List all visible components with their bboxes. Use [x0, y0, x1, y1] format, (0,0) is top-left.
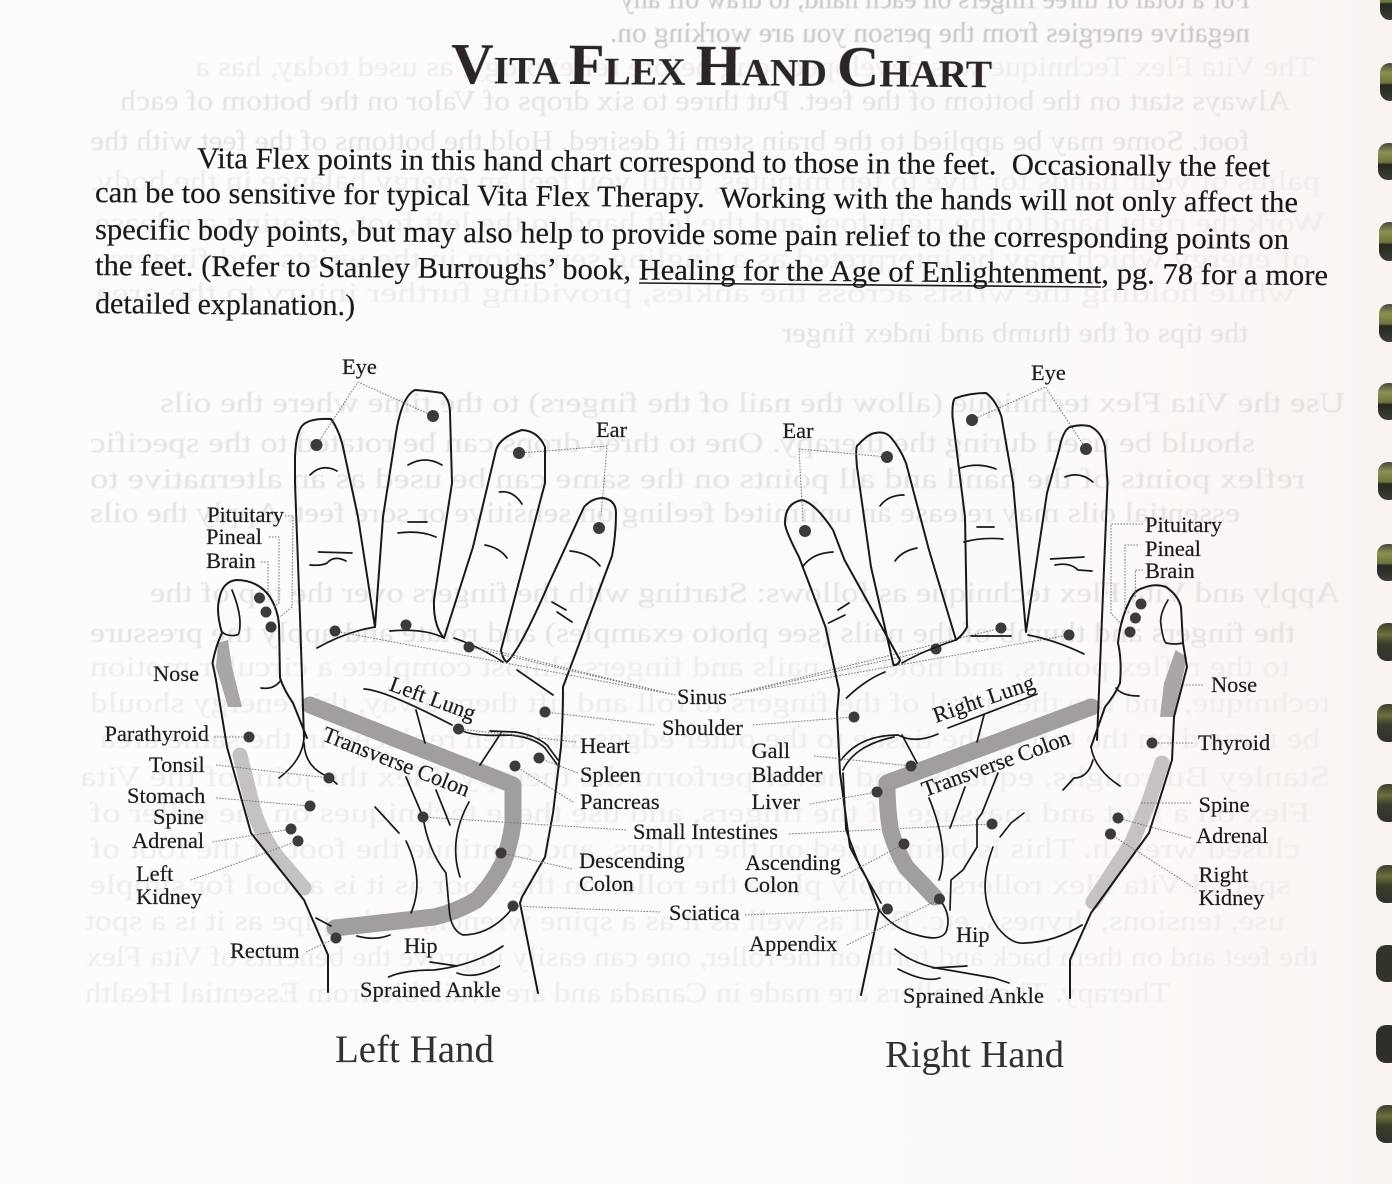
point: tonsil — [149, 752, 334, 784]
point: sciatica: Sciatica — [669, 900, 740, 925]
show-through text from the reverse page: should be used during the therapy. One to three drops can be rotated to the specific — [90, 428, 1255, 459]
point: appendix — [749, 894, 945, 956]
point: heart — [453, 724, 631, 758]
point: eye — [310, 354, 439, 451]
label: spine — [1141, 792, 1250, 817]
point: left kidney: Kidney — [136, 884, 203, 909]
show-through text from the reverse page: palms of your hands for five to ten minutes, until you feel an energy balance in the body. — [90, 166, 1320, 197]
point: ear: Ear — [596, 417, 628, 442]
show-through text from the reverse page: reflex points of the hand and all points on the same can be used as an alternative to — [90, 464, 1305, 495]
point: parathyroid: Parathyroid — [104, 721, 209, 746]
point: eye — [966, 360, 1092, 455]
show-through text from the reverse page: Use the Vita Flex technique (allow the nail of the fingers) to the time where the oils — [160, 388, 1345, 419]
point: ascending colon — [744, 838, 910, 897]
point: pituitary: Pituitary — [1145, 512, 1223, 537]
point: ear — [782, 418, 893, 537]
point: tonsil: Tonsil — [149, 752, 205, 777]
show-through text from the reverse page: to the reflex points, and hold the nails and fingers almost complete a circular motion — [90, 652, 1290, 683]
point: stomach: Stomach — [127, 783, 205, 808]
show-through text from the reverse page: use, tensions, dryness, etc. Roll as well as it as a spine wrench, and a pipe as it is a spot — [85, 906, 1285, 937]
label: left lung: Left Lung — [386, 671, 479, 725]
right hand: reflex bands — [887, 650, 1187, 902]
left hand: reflex bands — [216, 640, 513, 928]
point: heart: Heart — [580, 733, 631, 758]
point: thyroid: Thyroid — [1198, 730, 1270, 755]
heading: right hand: Right Hand — [885, 1034, 1064, 1076]
point: gall bladder — [752, 738, 916, 787]
point: stomach — [127, 783, 316, 812]
point: brain — [206, 548, 268, 604]
point: thyroid — [1146, 730, 1270, 755]
point: liver: Liver — [752, 789, 801, 814]
label: hip: Hip — [404, 933, 438, 958]
point: adrenal: Adrenal — [132, 828, 204, 853]
point: descending colon — [496, 848, 685, 896]
label: nose — [1183, 672, 1257, 697]
point: rectum: Rectum — [230, 938, 300, 963]
point: ascending colon: Ascending — [745, 850, 841, 875]
label: sprained ankle: Sprained Ankle — [360, 977, 501, 1002]
point: adrenal — [1112, 812, 1268, 848]
point: liver — [752, 786, 882, 814]
point: adrenal — [132, 824, 296, 853]
point: pancreas: Pancreas — [580, 789, 660, 814]
intro paragraph: Vita Flex points in this hand chart correspond to those in the feet. Occasionally the feet — [197, 142, 1271, 183]
show-through text from the reverse page: the tips of the thumb and index finger — [781, 318, 1248, 349]
label: hip: Hip — [956, 922, 990, 947]
right hand chart — [744, 360, 1270, 1076]
show-through text from the reverse page: essential oils may release an unlimited feeling on sensitive or sore feet. Apply the oils — [90, 498, 1240, 529]
show-through text from the reverse page: the fingers and thumb of the nails (see photo examples) and rotate and apply the pressure — [90, 618, 1295, 649]
show-through text from the reverse page: Apply and Vita Flex technique as follows: Starting with the fingers over the top of the — [150, 578, 1340, 609]
label: nose: Nose — [153, 661, 199, 686]
spiral binding — [1376, 0, 1392, 1143]
show-through text from the reverse page: special Vita Flex rollers. Simply place the roller on the floor as it is a tool for simple — [90, 870, 1290, 901]
label: transverse colon: Transverse Colon — [918, 725, 1073, 802]
point: sinus — [330, 620, 1074, 709]
point: spleen — [534, 752, 641, 787]
show-through text from the reverse page: the feet and on them back and forth on the roller, one can easily improve the benefits of Vita Flex — [86, 942, 1318, 973]
point: pineal: Pineal — [206, 524, 262, 549]
heading: left hand: Left Hand — [335, 1028, 494, 1071]
show-through text from the reverse page: Stanley Burroughs, equally, and never perform the therapy. Flex the joint of the Vita — [79, 762, 1330, 793]
show-through text from the reverse page: technique, and use the spiral of the fingers to roll and lift them away, this energy should — [90, 688, 1330, 719]
point: right kidney: Right — [1198, 862, 1249, 887]
point: eye: Eye — [1031, 360, 1066, 385]
right hand: outline — [785, 393, 1187, 998]
point: shoulder: Shoulder — [662, 715, 743, 740]
left hand: outline — [212, 390, 616, 993]
point: brain: Brain — [206, 548, 256, 573]
show-through text from the reverse page — [79, 0, 1345, 1009]
show-through text from the reverse page: closed wrench. This is being used on the rollers, and continue the foot of the foot of — [89, 834, 1300, 865]
point: ear: Ear — [782, 418, 814, 443]
point: pineal — [206, 524, 279, 618]
label: transverse colon: Transverse Colon — [319, 721, 474, 802]
point: descending colon: Colon — [579, 871, 634, 896]
point: parathyroid — [104, 721, 254, 746]
point: small intestines — [418, 812, 998, 844]
point: pineal: Pineal — [1145, 536, 1201, 561]
show-through text from the reverse page: Always start on the bottom of the feet. Put three to six drops of Valor on the bottom of each — [120, 86, 1290, 117]
show-through text from the reverse page: while holding the wrists across the ankles, providing further injury to the area — [94, 278, 1295, 309]
show-through text from the reverse page: of energy which may be interpreted as a tingling sensation in the wrists and fingers — [110, 244, 1310, 275]
show-through text from the reverse page: be moved on the top of the tissue to the outer edges and then replaced in the same area — [99, 724, 1320, 755]
intro paragraph: can be too sensitive for typical Vita Flex Therapy. Working with the hands will not only affect the — [95, 176, 1298, 219]
show-through text from the reverse page: Therapy. These rollers are made in Canada and are available from Essential Health — [85, 978, 1170, 1009]
point: pituitary — [207, 502, 293, 632]
point: brain — [1135, 558, 1195, 610]
show-through text from the reverse page: Work the right hand to the right foot and the left hand to the left foot, creating a release — [95, 208, 1325, 239]
point: sciatica — [508, 900, 893, 925]
point: pancreas — [510, 760, 660, 814]
point: right kidney — [1105, 828, 1265, 910]
intro paragraph — [95, 142, 1328, 322]
point: pineal — [1125, 536, 1201, 624]
point: gall bladder: Gall — [752, 738, 790, 763]
label: spine: Spine — [1198, 792, 1250, 817]
show-through text from the reverse page: foot. Some may be applied to the brain stem if desired. Hold the bottoms of the feet with the — [90, 126, 1250, 157]
point: ascending colon: Colon — [744, 872, 799, 897]
point: ear — [513, 417, 628, 534]
point: pituitary: Pituitary — [207, 502, 285, 527]
right hand: finger and palm creases — [802, 465, 1120, 983]
point: gall bladder: Bladder — [752, 762, 823, 787]
point: left kidney: Left — [136, 861, 174, 886]
intro paragraph: the feet. (Refer to Stanley Burroughs’ book, Healing for the Age of Enlightenment, pg. 78 for a more — [95, 249, 1328, 292]
show-through text from the reverse page: negative energies from the person you are working on. — [610, 18, 1250, 49]
point: right kidney: Kidney — [1198, 885, 1265, 910]
shared labels between hands — [330, 620, 1074, 925]
label: sprained ankle: Sprained Ankle — [903, 983, 1044, 1008]
show-through text from the reverse page: Flex on a foot and massage of the fingers, and use these techniques on the roller of — [89, 798, 1310, 829]
intro paragraph: detailed explanation.) — [95, 287, 355, 322]
point: pituitary — [1111, 512, 1223, 638]
left hand chart — [104, 354, 685, 1071]
point: sinus: Sinus — [677, 684, 727, 709]
point: descending colon: Descending — [579, 848, 685, 873]
point: spleen: Spleen — [580, 762, 641, 787]
label: spine: Spine — [153, 804, 204, 829]
point: appendix: Appendix — [749, 931, 837, 956]
label: nose: Nose — [1211, 672, 1257, 697]
intro paragraph: specific body points, but may also help to provide some pain relief to the corresponding points on — [95, 213, 1289, 256]
point: adrenal: Adrenal — [1196, 823, 1268, 848]
point: brain: Brain — [1145, 558, 1195, 583]
show-through text from the reverse page: The Vita Flex Technique was developed long before reflexology, as used today, has a — [194, 52, 1315, 83]
point: left kidney — [136, 836, 304, 909]
point: shoulder — [540, 706, 860, 740]
point: eye: Eye — [342, 354, 377, 379]
point: rectum — [230, 932, 342, 963]
point: small intestines: Small Intestines — [633, 819, 778, 844]
left hand: finger and palm creases — [279, 460, 600, 977]
title: VITA FLEX HAND CHART — [451, 31, 992, 100]
label: right lung: Right Lung — [929, 670, 1038, 728]
